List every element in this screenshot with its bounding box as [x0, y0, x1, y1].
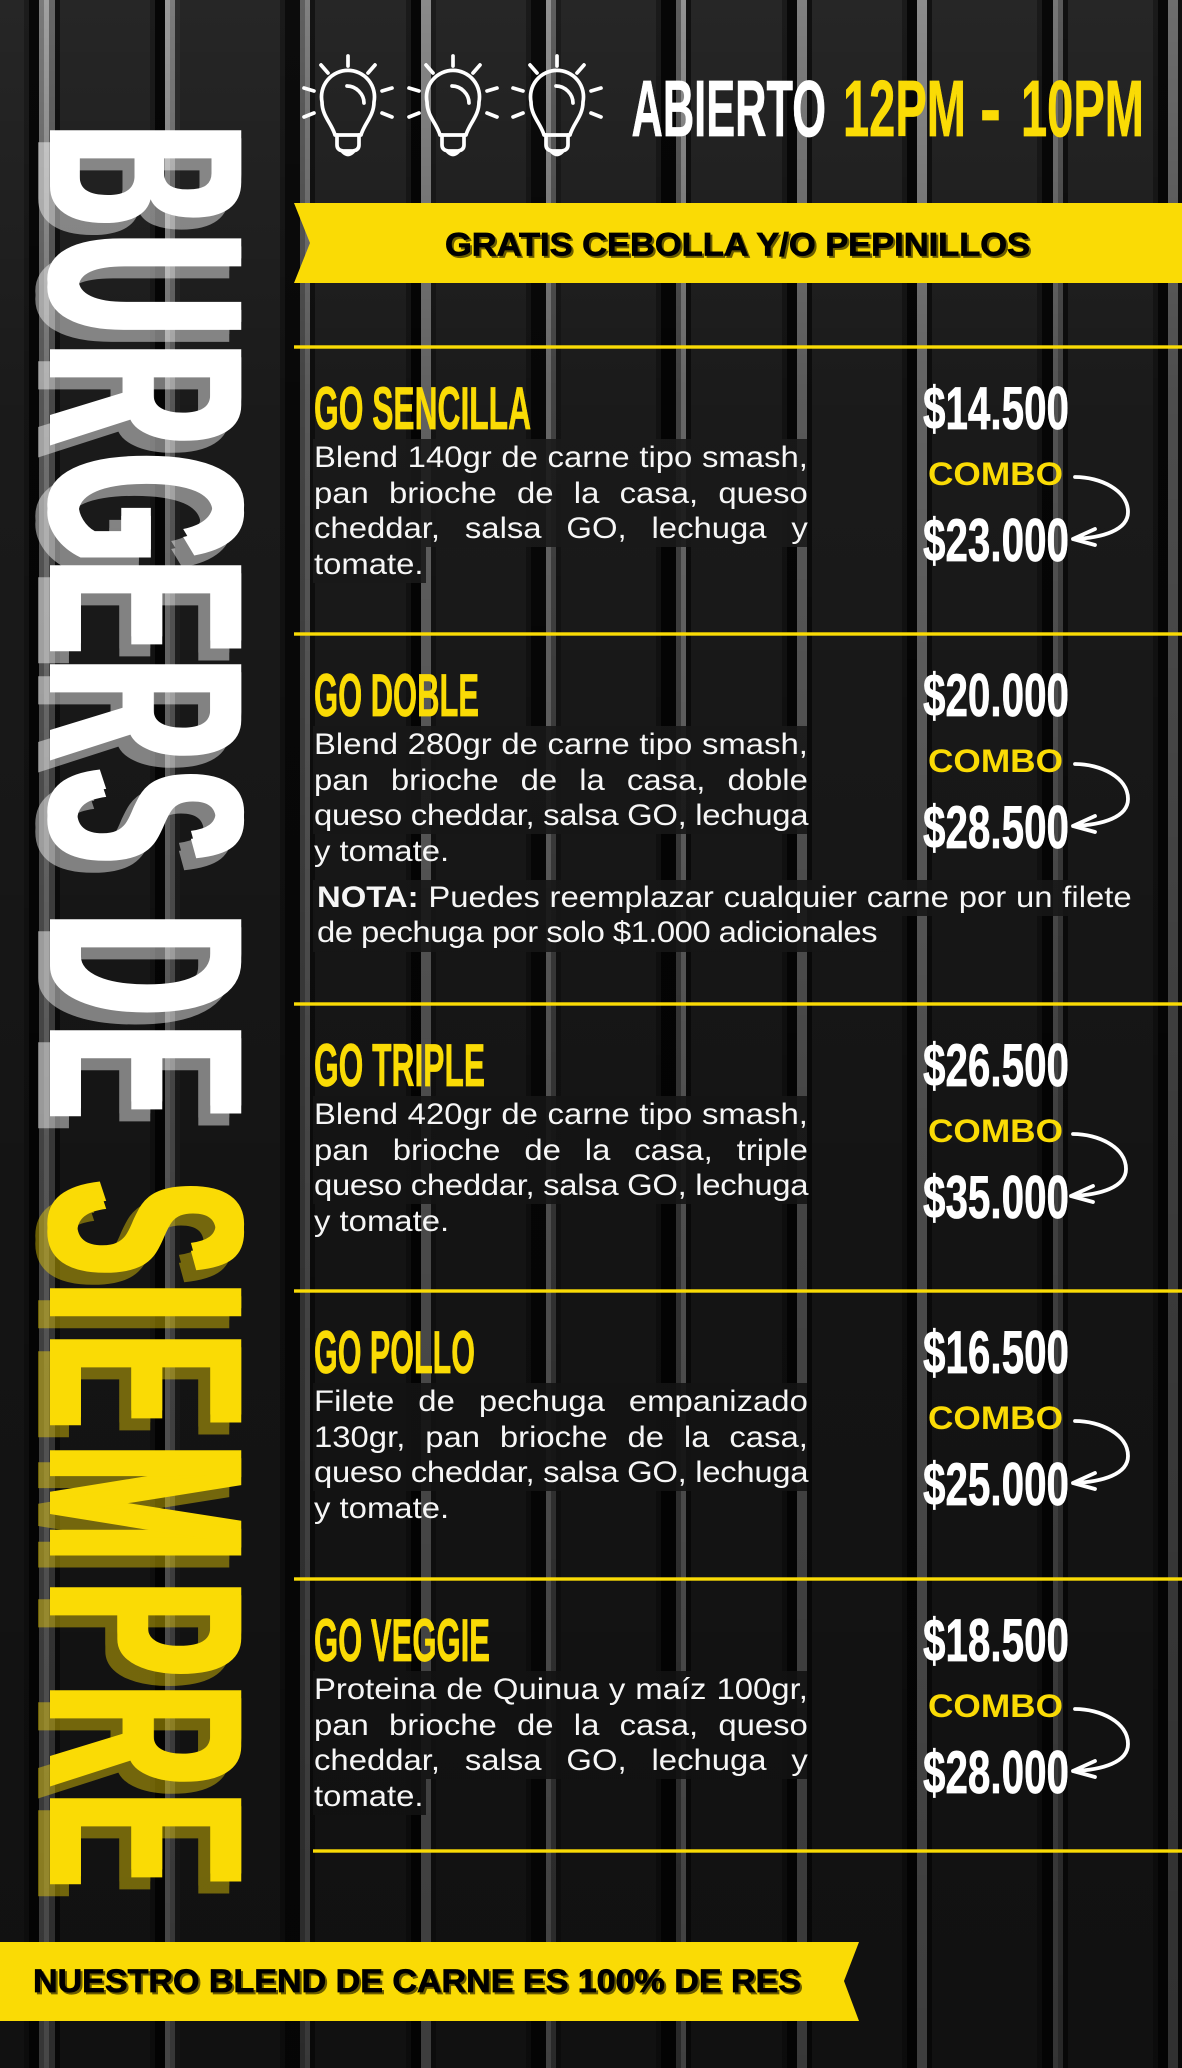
prices and name: go pollo	[314, 1319, 1130, 1518]
vertical title: burgers de siempre	[0, 121, 302, 1896]
note: chicken substitution	[317, 881, 1132, 949]
opening hours value: -	[980, 64, 1001, 153]
note: chicken substitution: NOTA: Puedes reemplazar cualquier carne por un filete	[317, 881, 1132, 914]
opening hours label: ABIERTO	[632, 64, 826, 153]
description: go sencilla: tomate.	[314, 548, 424, 580]
description: go triple: queso cheddar, salsa GO, lechuga	[314, 1169, 808, 1202]
prices and name: go triple: GO TRIPLE	[314, 1032, 485, 1099]
prices and name: go triple	[314, 1032, 1128, 1231]
prices and name: go sencilla: $23.000	[923, 507, 1069, 574]
description: go triple	[314, 1098, 809, 1238]
description: go pollo: 130gr, pan brioche de la casa,	[314, 1420, 808, 1454]
top banner: gratis cebolla y/o pepinillos: GRATIS CEBOLLA Y/O PEPINILLOS	[445, 226, 1030, 262]
description: go veggie	[314, 1673, 808, 1812]
description: go sencilla: cheddar, salsa GO, lechuga y	[314, 512, 808, 545]
prices and name: go doble: GO DOBLE	[314, 662, 479, 729]
prices and name: go veggie: $18.500	[923, 1607, 1069, 1674]
prices and name: go doble	[314, 662, 1130, 861]
prices and name: go doble: $20.000	[923, 662, 1069, 729]
panel: go veggie	[314, 1607, 1130, 1812]
prices and name: go pollo: GO POLLO	[314, 1319, 475, 1386]
description: go veggie: tomate.	[314, 1780, 424, 1812]
prices and name: go sencilla: GO SENCILLA	[314, 375, 531, 442]
panel: go triple	[314, 1032, 1128, 1238]
description: go pollo	[314, 1385, 809, 1524]
panel: go sencilla	[314, 375, 1130, 580]
opening hours value: 12PM	[843, 64, 966, 153]
note: chicken substitution: de pechuga por solo $1.000 adicionales	[317, 916, 877, 949]
prices and name: go triple: $35.000	[923, 1164, 1069, 1231]
description: go triple: y tomate.	[314, 1204, 449, 1238]
description: go sencilla	[314, 441, 808, 580]
description: go pollo: y tomate.	[314, 1492, 449, 1524]
prices and name: go sencilla: $14.500	[923, 375, 1069, 442]
icon: light bulb 3	[513, 56, 601, 154]
prices and name: go pollo: $25.000	[923, 1451, 1069, 1518]
description: go doble: y tomate.	[314, 835, 449, 868]
description: go triple: pan brioche de la casa, triple	[314, 1134, 808, 1166]
description: go pollo: Filete de pechuga empanizado	[314, 1385, 808, 1418]
prices and name: go doble: COMBO	[928, 743, 1063, 779]
icon: light bulb 2	[409, 56, 497, 154]
prices and name: go doble: $28.500	[923, 794, 1069, 861]
description: go triple: Blend 420gr de carne tipo smash,	[314, 1098, 808, 1131]
opening hours value	[843, 64, 1144, 153]
prices and name: go veggie: GO VEGGIE	[314, 1607, 490, 1674]
prices and name: go sencilla	[314, 375, 1130, 574]
icon: light bulb 1	[304, 56, 392, 154]
prices and name: go pollo: COMBO	[928, 1400, 1063, 1436]
bottom banner: nuestro blend de carne es 100% de res: NUESTRO BLEND DE CARNE ES 100% DE RES	[33, 1963, 801, 1999]
prices and name: go pollo: $16.500	[923, 1319, 1069, 1386]
description: go veggie: pan brioche de la casa, queso	[314, 1708, 808, 1742]
description: go veggie: cheddar, salsa GO, lechuga y	[314, 1744, 808, 1777]
panel: go doble	[314, 662, 1132, 949]
description: go doble: pan brioche de la casa, doble	[314, 764, 808, 797]
prices and name: go sencilla: COMBO	[928, 456, 1063, 492]
description: go doble: queso cheddar, salsa GO, lechuga	[314, 799, 808, 832]
panel: go pollo	[314, 1319, 1130, 1524]
description: go sencilla: pan brioche de la casa, queso	[314, 476, 808, 510]
header: bulbs and opening hours	[302, 54, 1144, 156]
prices and name: go veggie: COMBO	[928, 1688, 1063, 1724]
description: go doble: Blend 280gr de carne tipo smash,	[314, 728, 808, 761]
prices and name: go triple: COMBO	[928, 1113, 1063, 1149]
prices and name: go triple: $26.500	[923, 1032, 1069, 1099]
prices and name: go veggie	[314, 1607, 1130, 1806]
description: go sencilla: Blend 140gr de carne tipo smash,	[314, 441, 808, 474]
description: go veggie: Proteina de Quinua y maíz 100gr,	[314, 1673, 808, 1706]
description: go pollo: queso cheddar, salsa GO, lechuga	[314, 1456, 808, 1489]
description: go doble	[314, 728, 809, 868]
top banner: gratis cebolla y/o pepinillos	[294, 203, 1182, 283]
prices and name: go veggie: $28.000	[923, 1739, 1069, 1806]
